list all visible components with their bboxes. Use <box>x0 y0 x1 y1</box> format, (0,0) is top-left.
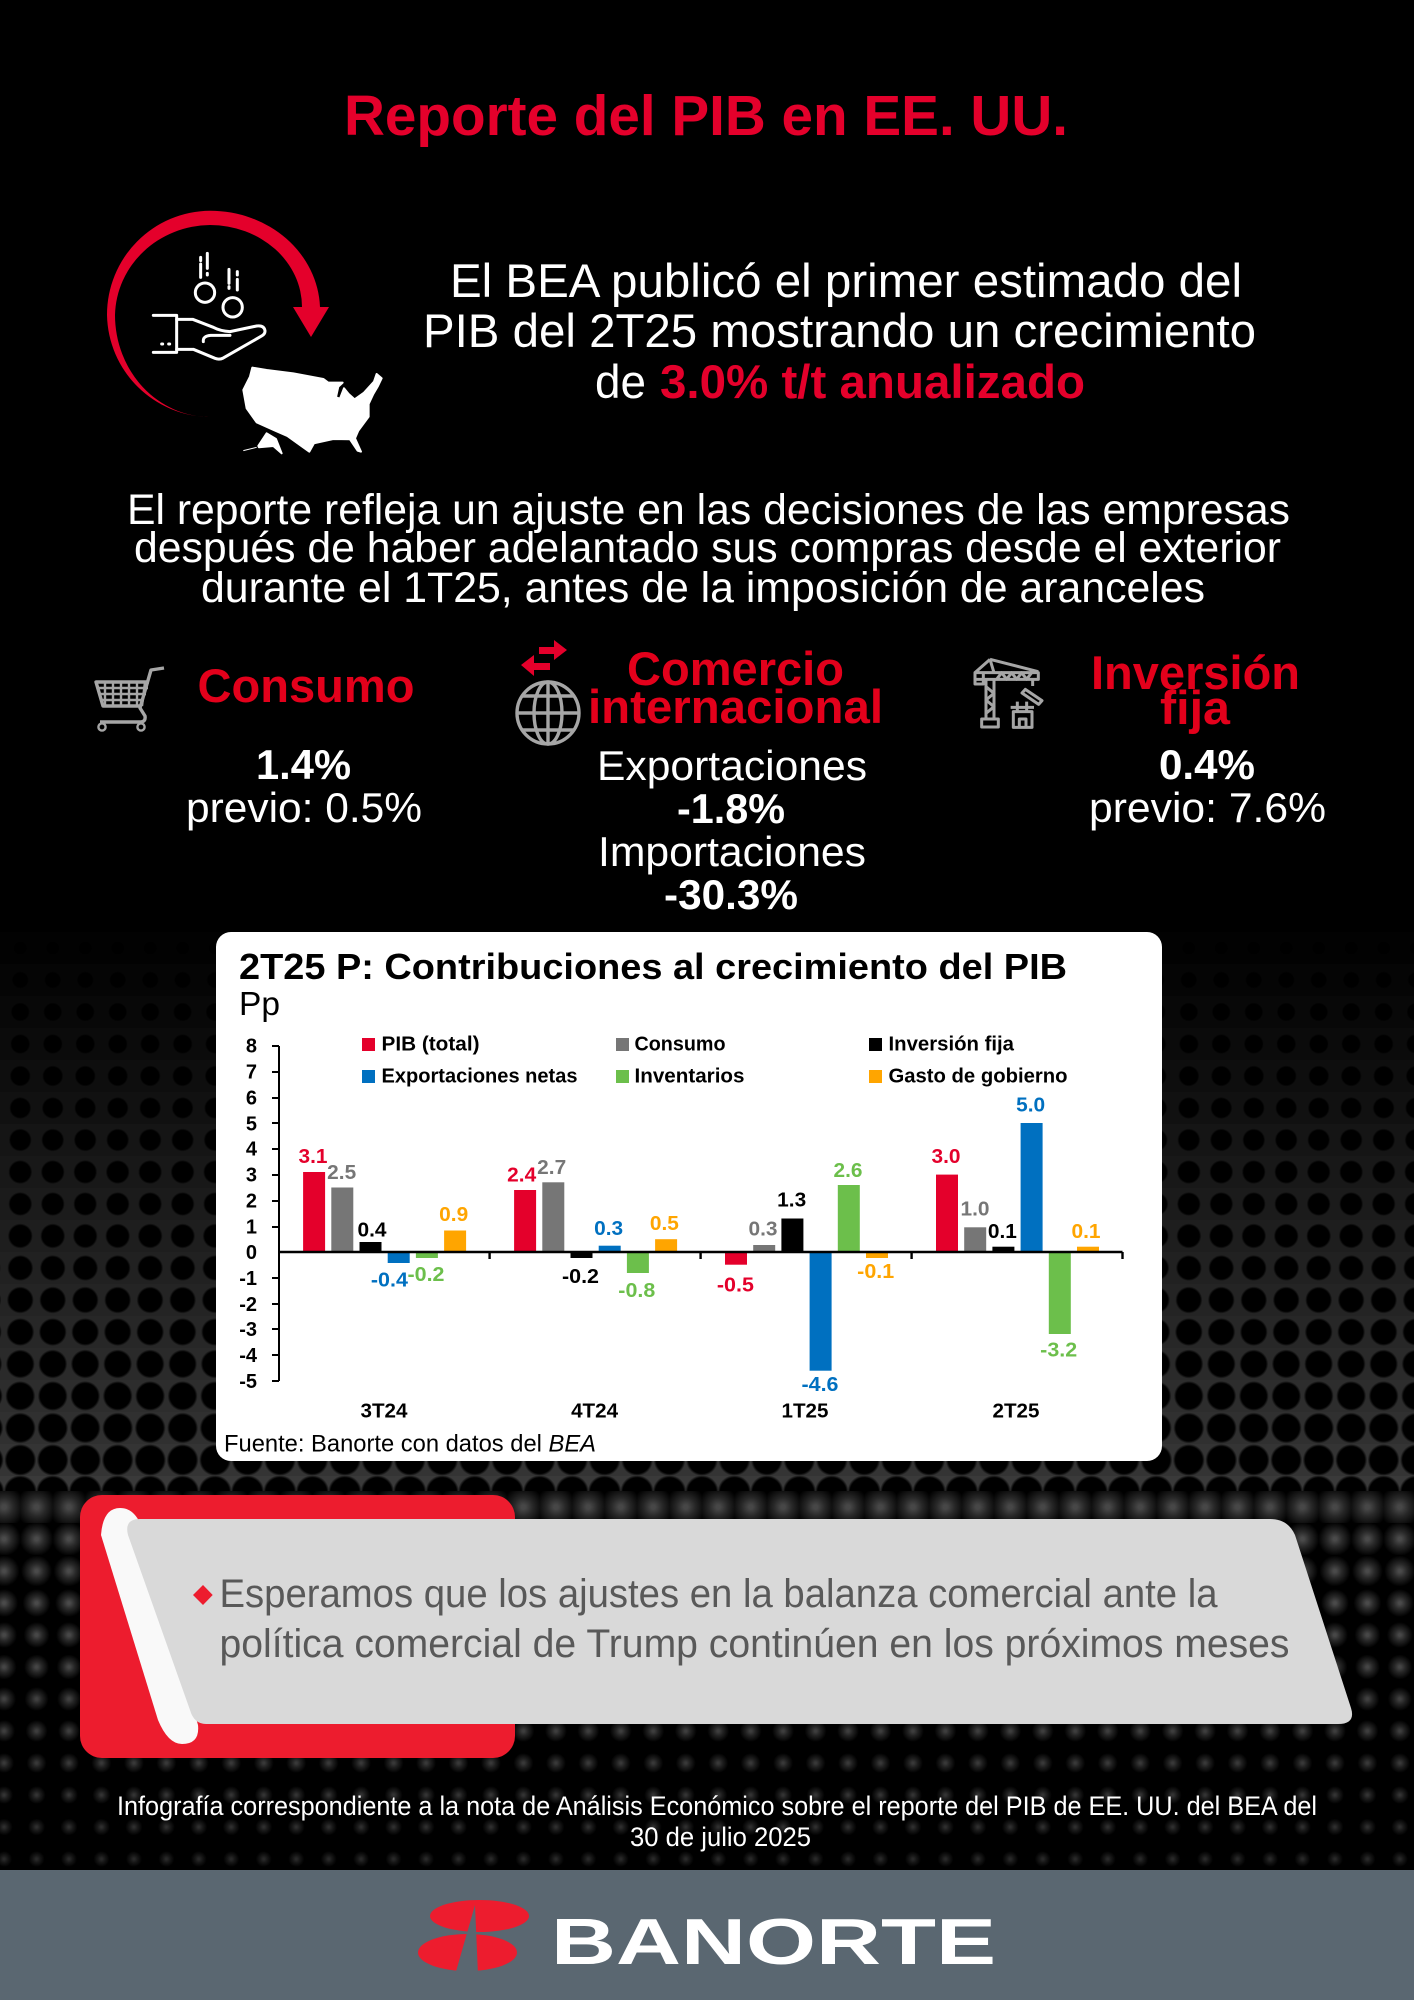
chart unit: Pp <box>239 986 280 1023</box>
y axis with labels: 3 <box>246 1164 257 1186</box>
text: explanatory paragraph: después de haber adelantado sus compras desde el exterior <box>134 524 1281 572</box>
heading: Comercio internacional: internacional <box>588 680 883 733</box>
footer band <box>0 1870 1414 2000</box>
chart source: Fuente: Banorte con datos del BEA <box>224 1430 596 1458</box>
callout text: política comercial de Trump continúen en los próximos meses <box>220 1622 1290 1666</box>
footnote <box>117 1791 1317 1852</box>
callout text <box>220 1572 1290 1666</box>
y axis with labels: 6 <box>246 1088 257 1110</box>
data labels: 2.5 <box>327 1162 356 1184</box>
y axis with labels: 1 <box>246 1216 257 1238</box>
figures: comercio internacional: Importaciones <box>598 828 866 875</box>
legend <box>362 1034 1068 1088</box>
data labels: -0.4 <box>371 1270 409 1292</box>
data labels: 3.0 <box>932 1146 960 1168</box>
logo: Banorte wordmark: BANORTE <box>551 1905 996 1978</box>
y axis with labels: -2 <box>239 1294 257 1316</box>
data labels: -3.2 <box>1040 1340 1077 1362</box>
data labels: -0.8 <box>618 1280 655 1302</box>
data labels: -0.2 <box>562 1266 599 1288</box>
panel: outlook callout <box>80 1495 1352 1758</box>
text: main statement <box>423 255 1256 409</box>
icon: curved red arrow <box>107 211 329 417</box>
text: main statement: 3.0% t/t anualizado <box>660 356 1085 409</box>
data labels <box>298 1095 1100 1396</box>
data labels: -0.5 <box>717 1275 754 1297</box>
text: explanatory paragraph: El reporte refleja un ajuste en las decisiones de las empresas <box>127 486 1290 534</box>
figures: comercio internacional: -30.3% <box>664 871 798 918</box>
text: explanatory paragraph <box>127 486 1290 612</box>
icon: two-way trade arrows <box>521 640 567 676</box>
figures: comercio internacional: -1.8% <box>677 785 785 832</box>
data labels: 2.6 <box>834 1160 862 1182</box>
text: main statement: El BEA publicó el primer estimado del <box>450 255 1242 308</box>
legend: PIB (total) <box>382 1034 480 1056</box>
data labels: 0.3 <box>748 1219 778 1241</box>
legend: Exportaciones netas <box>382 1066 578 1088</box>
y axis with labels: -5 <box>239 1371 257 1393</box>
y axis with labels <box>239 1036 279 1393</box>
panel: chart card <box>216 932 1162 1461</box>
figures: comercio internacional <box>597 742 867 918</box>
data labels: 0.1 <box>988 1221 1017 1243</box>
figures: inversion fija <box>1089 741 1326 831</box>
footnote: 30 de julio 2025 <box>630 1822 811 1852</box>
callout text: Esperamos que los ajustes en la balanza comercial ante la <box>220 1572 1218 1616</box>
logo: Banorte symbol <box>418 1900 529 1975</box>
legend: Inventarios <box>634 1066 744 1088</box>
y axis with labels: 7 <box>246 1062 257 1084</box>
data labels: 0.1 <box>1072 1221 1100 1243</box>
figures: consumo: 1.4% <box>256 741 351 788</box>
figures: inversion fija: previo: 7.6% <box>1089 784 1326 831</box>
bars: 4T24 <box>514 1182 677 1273</box>
y axis with labels: -3 <box>239 1319 257 1341</box>
icon: construction crane <box>975 659 1042 727</box>
data labels: 1.0 <box>960 1199 990 1221</box>
heading: Inversión fija: fija <box>1160 681 1231 734</box>
heading: Comercio internacional <box>588 642 883 733</box>
data labels: -4.6 <box>802 1374 838 1396</box>
data labels: -0.2 <box>408 1264 444 1286</box>
legend: Consumo <box>634 1034 726 1056</box>
data labels: -0.1 <box>857 1261 894 1283</box>
footnote: Infografía correspondiente a la nota de Análisis Económico sobre el reporte del PIB de EE. UU. del BEA del <box>117 1791 1317 1821</box>
legend: Gasto de gobierno <box>888 1066 1068 1088</box>
data labels: 0.4 <box>358 1220 387 1242</box>
y axis with labels: 5 <box>246 1114 257 1136</box>
data labels: 2.7 <box>537 1157 566 1179</box>
icon: globe <box>517 682 579 744</box>
icon: map of the United States <box>243 368 382 453</box>
y axis with labels: 4 <box>246 1138 258 1160</box>
text: main statement: PIB del 2T25 mostrando un crecimiento <box>423 305 1256 358</box>
y axis with labels: -4 <box>239 1345 258 1367</box>
data labels: 3.1 <box>298 1146 328 1168</box>
y axis with labels: 0 <box>246 1242 257 1264</box>
title: Reporte del PIB en EE. UU. <box>344 84 1068 147</box>
heading: Inversión fija: Inversión <box>1091 646 1300 699</box>
data labels: 2.4 <box>507 1165 537 1187</box>
category labels: 1T25 <box>782 1400 828 1422</box>
y axis with labels: 2 <box>246 1190 257 1212</box>
x axis <box>279 1252 1122 1259</box>
text: explanatory paragraph: durante el 1T25, antes de la imposición de aranceles <box>201 564 1205 612</box>
data labels: 0.5 <box>650 1213 679 1235</box>
data labels: 0.9 <box>439 1204 468 1226</box>
bars: 2T25 <box>936 1123 1099 1334</box>
y axis with labels: 8 <box>246 1036 257 1058</box>
figures: consumo: previo: 0.5% <box>186 784 422 831</box>
bars: 3T24 <box>303 1172 466 1263</box>
category labels: 2T25 <box>992 1400 1040 1422</box>
figures: consumo <box>186 741 422 831</box>
bars: 1T25 <box>725 1185 888 1371</box>
text: main statement: de <box>595 356 646 409</box>
data labels: 5.0 <box>1016 1095 1045 1117</box>
heading: Comercio internacional: Comercio <box>627 642 844 695</box>
category labels: 3T24 <box>360 1400 408 1422</box>
icon: hand with falling coins <box>153 253 265 359</box>
category labels: 4T24 <box>571 1400 619 1422</box>
figures: comercio internacional: Exportaciones <box>597 742 867 789</box>
category labels <box>360 1400 1040 1422</box>
bullet diamond <box>193 1585 213 1605</box>
heading: Consumo: Consumo <box>198 659 414 712</box>
data labels: 1.3 <box>777 1190 806 1212</box>
y axis with labels: -1 <box>239 1268 257 1290</box>
legend: Inversión fija <box>888 1034 1015 1056</box>
data labels: 0.3 <box>594 1218 623 1240</box>
heading: Inversión fija <box>1091 646 1300 734</box>
figures: inversion fija: 0.4% <box>1159 741 1255 788</box>
chart title: 2T25 P: Contribuciones al crecimiento del PIB <box>239 946 1067 987</box>
icon: shopping cart <box>96 668 164 731</box>
